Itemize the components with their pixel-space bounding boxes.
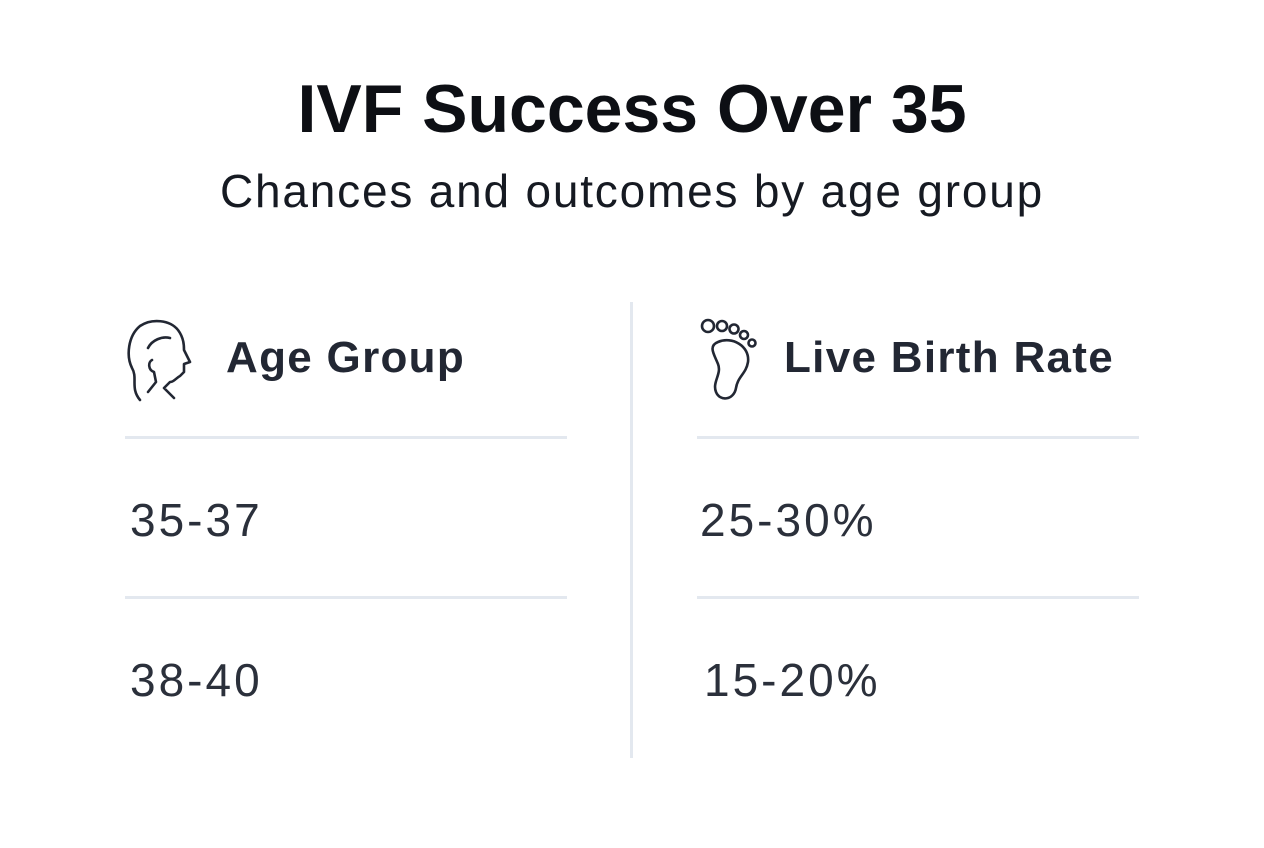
- header: Live Birth Rate: Live Birth Rate: [784, 333, 1114, 382]
- subtitle: Chances and outcomes by age group: [220, 165, 1044, 217]
- value: 38-40: 38-40: [130, 654, 263, 706]
- value: 15-20%: 15-20%: [704, 654, 881, 706]
- panel: live birth rate column: [697, 318, 1139, 706]
- icon: head profile: [127, 320, 192, 402]
- title: IVF Success Over 35: [297, 71, 967, 147]
- header: Age Group: Age Group: [226, 333, 465, 382]
- vertical divider: [630, 302, 633, 758]
- icon: footprint: [700, 318, 757, 400]
- panel: age group column: [125, 320, 567, 706]
- value: 25-30%: 25-30%: [700, 494, 877, 546]
- value: 35-37: 35-37: [130, 494, 263, 546]
